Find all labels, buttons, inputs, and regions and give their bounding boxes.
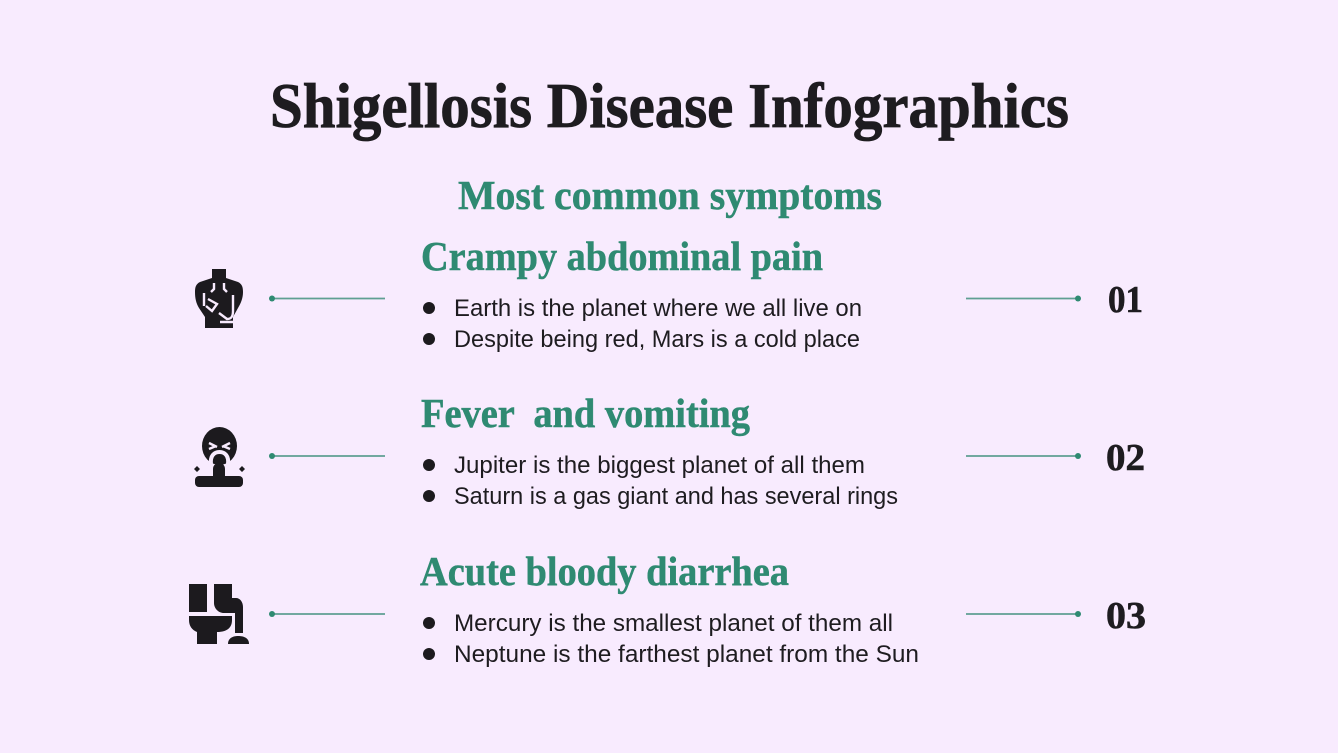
number 02: 02 — [1106, 437, 1145, 479]
bullet list: Despite being red, Mars is a cold place — [454, 326, 860, 353]
row 1: crampy abdominal pain — [195, 233, 1143, 353]
connector right — [966, 611, 1081, 617]
subtitle: Most common symptoms — [458, 172, 882, 218]
heading: Fever and vomiting — [421, 390, 750, 436]
connector left — [269, 453, 385, 459]
row 2: fever and vomiting — [194, 390, 1145, 510]
number 01: 01 — [1108, 279, 1143, 321]
row 3: acute bloody diarrhea — [189, 548, 1146, 668]
bullet list: Neptune is the farthest planet from the Sun — [454, 641, 919, 668]
icon: torso with abdominal pain — [195, 269, 243, 328]
number 03: 03 — [1106, 595, 1146, 637]
title: Shigellosis Disease Infographics — [270, 71, 1069, 141]
icon: toilet and plunger — [189, 584, 249, 644]
bullet list — [423, 452, 898, 510]
bullet list: Earth is the planet where we all live on — [454, 295, 862, 322]
icon: vomiting face — [194, 427, 245, 487]
connector left — [269, 296, 385, 302]
connector right — [966, 453, 1081, 459]
bullet list: Saturn is a gas giant and has several rings — [454, 483, 898, 510]
connector left — [269, 611, 385, 617]
heading: Crampy abdominal pain — [421, 233, 823, 279]
bullet list: Jupiter is the biggest planet of all them — [454, 452, 865, 479]
bullet list — [423, 295, 862, 353]
bullet list — [423, 610, 919, 668]
bullet list: Mercury is the smallest planet of them all — [454, 610, 893, 637]
connector right — [966, 296, 1081, 302]
heading: Acute bloody diarrhea — [420, 548, 789, 594]
